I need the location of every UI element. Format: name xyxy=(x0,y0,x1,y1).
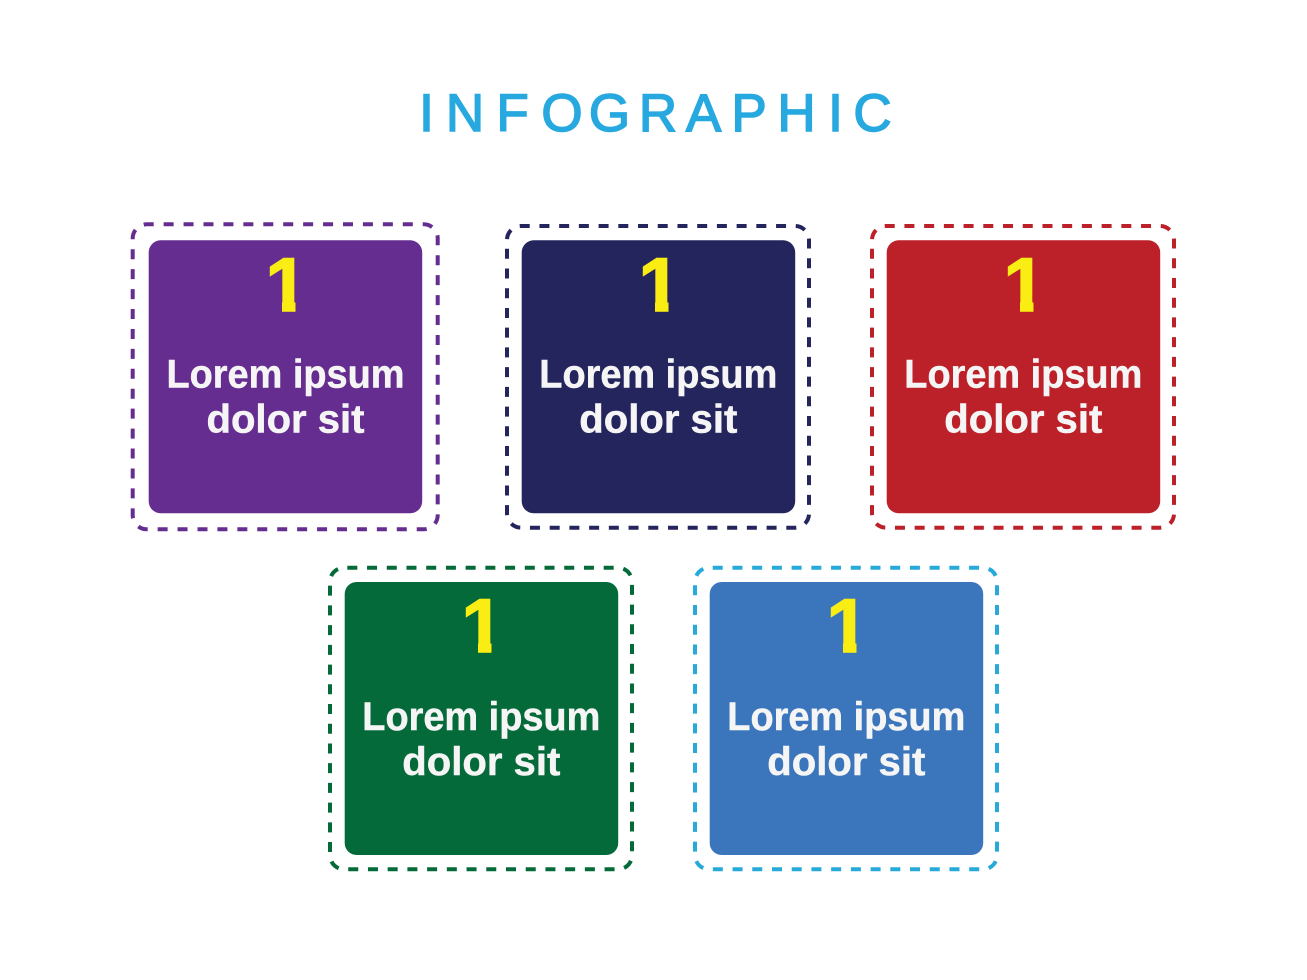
panel: blue card xyxy=(695,568,997,869)
panel: navy card: dolor sit xyxy=(579,397,737,441)
panel: blue card: 1 xyxy=(826,584,869,669)
panel: blue card: Lorem ipsum xyxy=(727,695,965,739)
panel: green card xyxy=(330,568,632,869)
panel: green card: dolor sit xyxy=(402,740,560,784)
title: INFOGRAPHIC xyxy=(419,84,892,143)
panel: navy card xyxy=(507,226,809,528)
panel: red card xyxy=(872,226,1174,528)
panel: navy card: Lorem ipsum xyxy=(539,353,777,397)
panel: blue card: dolor sit xyxy=(767,740,925,784)
panel: red card: dolor sit xyxy=(944,397,1102,441)
panel: green card: Lorem ipsum xyxy=(362,695,600,739)
panel: purple card: 1 xyxy=(265,243,308,328)
panel: green card: 1 xyxy=(461,584,504,669)
panel: red card: 1 xyxy=(1003,243,1046,328)
panel: purple card: dolor sit xyxy=(206,397,364,441)
panel: red card: Lorem ipsum xyxy=(904,353,1142,397)
panel: purple card xyxy=(133,224,438,529)
panel: navy card: 1 xyxy=(638,243,681,328)
panel: purple card: Lorem ipsum xyxy=(166,353,404,397)
